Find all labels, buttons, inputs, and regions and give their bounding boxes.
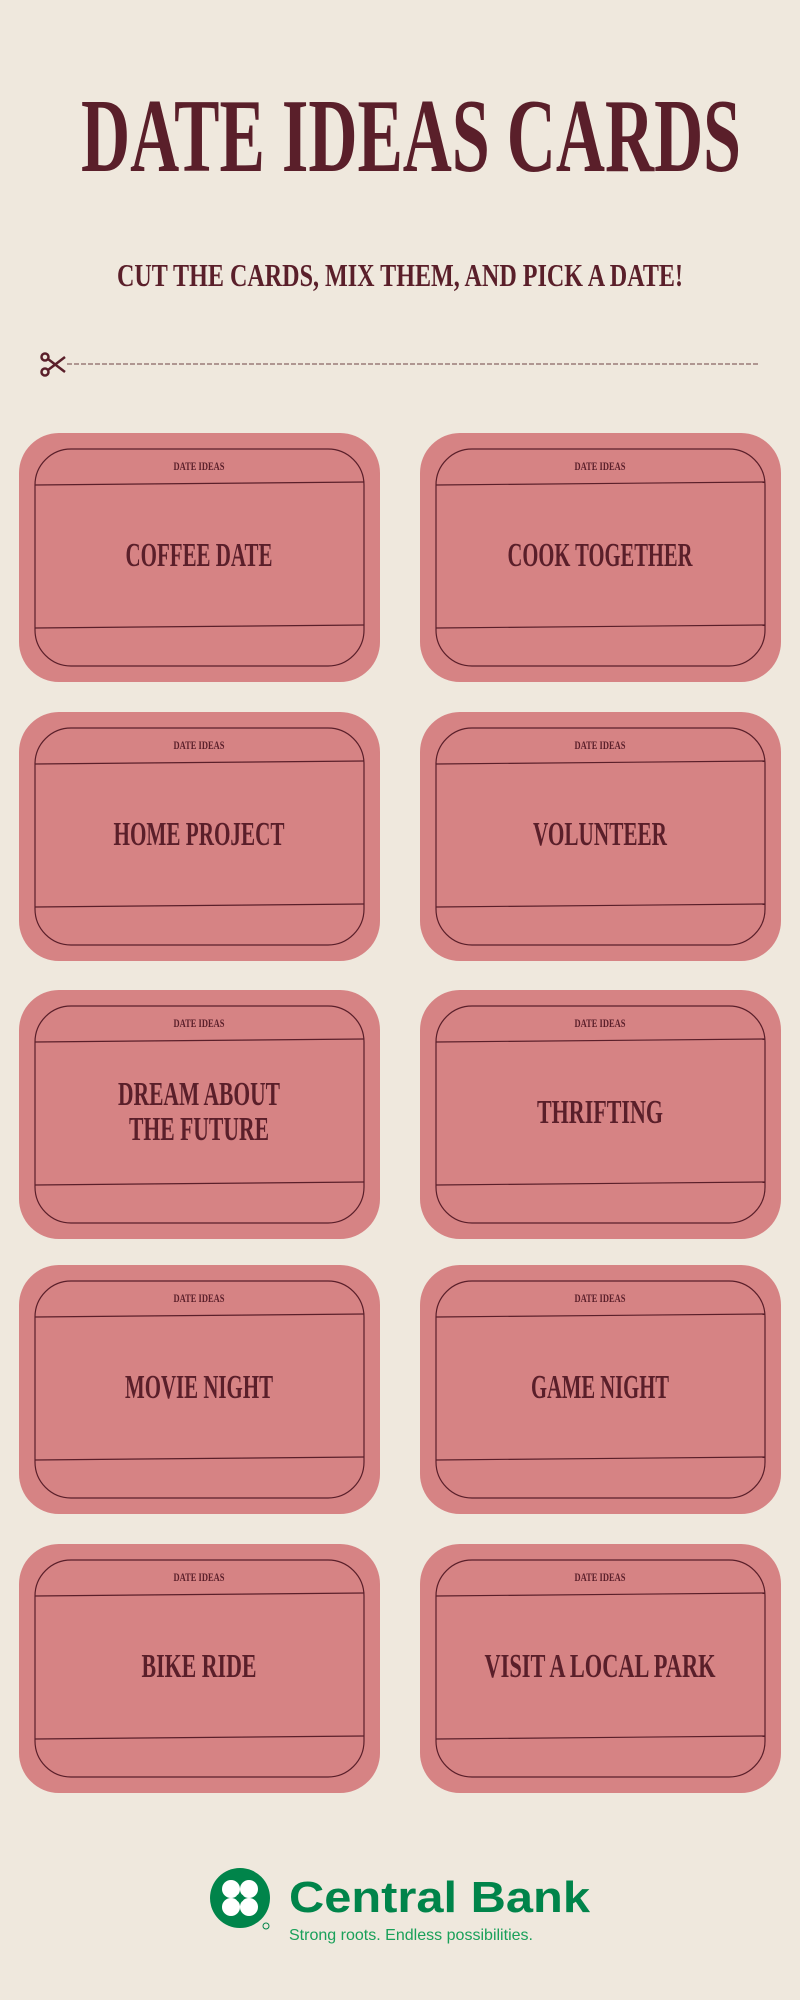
card: cook together: DATE IDEAS xyxy=(574,459,626,473)
card: dream about the future: DREAM ABOUT xyxy=(118,1076,280,1113)
card: game night xyxy=(420,1265,781,1514)
card: bike ride xyxy=(19,1544,380,1793)
card: visit a local park: DATE IDEAS xyxy=(574,1570,626,1584)
card: home project: DATE IDEAS xyxy=(174,738,225,752)
card: bike ride: BIKE RIDE xyxy=(142,1648,256,1685)
card: thrifting: DATE IDEAS xyxy=(574,1016,626,1030)
card: coffee date: COFFEE DATE xyxy=(126,537,272,574)
cut line xyxy=(67,363,760,365)
card: home project: HOME PROJECT xyxy=(114,816,285,853)
card: dream about the future: DATE IDEAS xyxy=(174,1016,225,1030)
card: movie night: DATE IDEAS xyxy=(174,1291,225,1305)
card: volunteer: VOLUNTEER xyxy=(533,816,667,853)
card: movie night: MOVIE NIGHT xyxy=(125,1369,273,1406)
card: volunteer xyxy=(420,712,781,961)
card: cook together xyxy=(420,433,781,682)
card: game night: GAME NIGHT xyxy=(531,1369,669,1406)
logo: Central Bank: Central Bank xyxy=(289,1873,591,1922)
card: movie night xyxy=(19,1265,380,1514)
logo: Central Bank xyxy=(210,1868,591,1944)
card: coffee date xyxy=(19,433,380,682)
card: game night: DATE IDEAS xyxy=(574,1291,626,1305)
card: volunteer: DATE IDEAS xyxy=(574,738,626,752)
icon: scissors xyxy=(42,354,65,376)
card: dream about the future: THE FUTURE xyxy=(129,1111,269,1148)
card: bike ride: DATE IDEAS xyxy=(174,1570,225,1584)
card: thrifting: THRIFTING xyxy=(537,1094,663,1131)
card: thrifting xyxy=(420,990,781,1239)
card: visit a local park xyxy=(420,1544,781,1793)
card: dream about the future xyxy=(19,990,380,1239)
card: home project xyxy=(19,712,380,961)
logo: Central Bank: Strong roots. Endless possibilities. xyxy=(289,1927,533,1944)
card: coffee date: DATE IDEAS xyxy=(174,459,225,473)
icon: flower xyxy=(210,1868,270,1929)
